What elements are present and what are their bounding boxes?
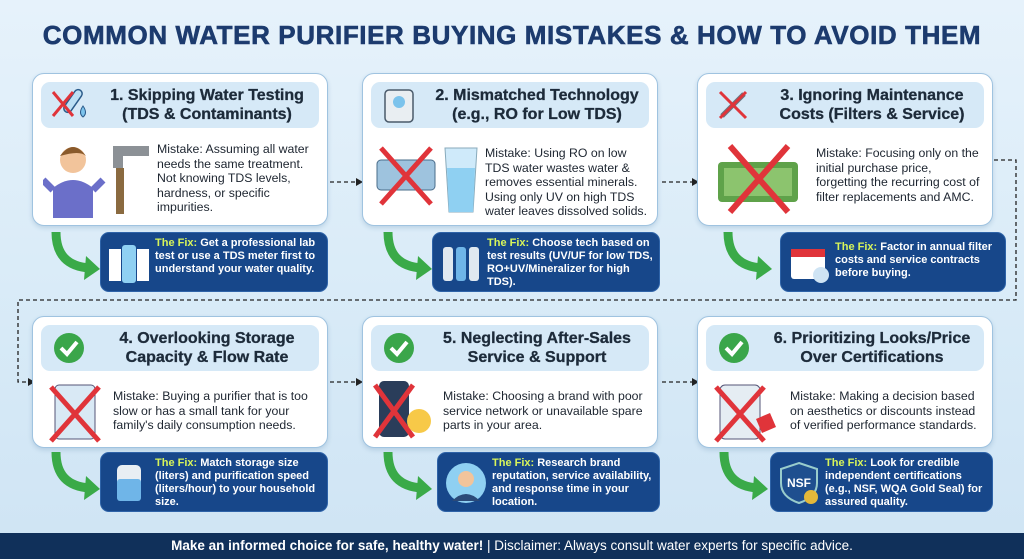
panel: 3 ignoring maintenance costs <box>697 73 993 226</box>
fix box 5 <box>437 452 660 512</box>
fix box 6: The Fix: Look for credible independent certifications (e.g., NSF, WQA Gold Seal) for assured quality. <box>825 457 982 508</box>
green arrow 2 <box>384 232 432 280</box>
heading 4 <box>41 325 319 371</box>
panel: 6 looks/price over certifications <box>697 316 993 448</box>
heading 2 <box>371 82 649 128</box>
fix box 3: The Fix: Factor in annual filter costs and service contracts before buying. <box>835 241 992 279</box>
fix box 1: The Fix: Get a professional lab test or use a TDS meter first to understand your water quality. <box>155 237 315 275</box>
fix box 6: NSF <box>787 476 811 490</box>
title: COMMON WATER PURIFIER BUYING MISTAKES & HOW TO AVOID THEM <box>43 20 981 50</box>
heading 4: Capacity & Flow Rate <box>126 349 288 366</box>
panel: 5 after-sales service <box>362 316 658 448</box>
mistake text: Mistake: Using RO on low TDS water wastes water & removes essential minerals. Using only UV on high TDS water leaves dissolved solids. <box>485 146 647 218</box>
green arrow 3 <box>724 232 772 280</box>
fix box 4 <box>100 452 328 512</box>
panel: 2 mismatched technology <box>362 73 658 226</box>
illustration: fancy purifier crossed <box>714 384 776 443</box>
green arrow 4 <box>52 452 100 500</box>
green arrow 1 <box>52 232 100 280</box>
mistake text: Mistake: Buying a purifier that is too slow or has a small tank for your family's daily consumption needs. <box>113 389 308 432</box>
illustration: broken phone and sad face <box>373 381 431 438</box>
illustration: water tank crossed <box>49 384 101 443</box>
fix box 5: The Fix: Research brand reputation, service availability, and response time in your location. <box>492 457 651 508</box>
heading 5 <box>371 325 649 371</box>
heading 1 <box>41 82 319 128</box>
footer: Make an informed choice for safe, healthy water! | Disclaimer: Always consult water experts for specific advice. <box>171 538 853 553</box>
fix box 3 <box>780 232 1006 292</box>
heading 5: Service & Support <box>468 349 606 366</box>
illustration: money crossed <box>718 144 798 214</box>
mistake text: Mistake: Choosing a brand with poor service network or unavailable spare parts in your area. <box>443 389 643 432</box>
panel: 1 skipping water testing <box>32 73 328 226</box>
illustration: RO membrane and glass <box>376 146 478 212</box>
green arrow 5 <box>384 452 432 500</box>
fix box 4: The Fix: Match storage size (liters) and purification speed (liters/hour) to your household size. <box>155 457 315 508</box>
heading 5: 5. Neglecting After-Sales <box>443 330 631 347</box>
fix box 1 <box>100 232 328 292</box>
heading 3 <box>706 82 984 128</box>
fix box 2: The Fix: Choose tech based on test results (UV/UF for low TDS, RO+UV/Mineralizer for high TDS). <box>487 237 653 288</box>
heading 2: (e.g., RO for Low TDS) <box>452 106 622 123</box>
heading 3: 3. Ignoring Maintenance <box>780 87 964 104</box>
heading 6 <box>706 325 984 371</box>
heading 6: Over Certifications <box>800 349 944 366</box>
fix box 6 <box>770 452 993 512</box>
panel: 4 storage capacity <box>32 316 328 448</box>
heading 3: Costs (Filters & Service) <box>780 106 964 123</box>
mistake text: Mistake: Assuming all water needs the same treatment. Not knowing TDS levels, hardness, or specific impurities. <box>157 142 309 214</box>
heading 6: 6. Prioritizing Looks/Price <box>774 330 970 347</box>
heading 4: 4. Overlooking Storage <box>119 330 295 347</box>
heading 1: 1. Skipping Water Testing <box>110 87 304 104</box>
footer <box>0 533 1024 559</box>
illustration: person and tap <box>43 146 149 218</box>
green arrow 6 <box>720 452 768 500</box>
mistake text: Mistake: Making a decision based on aesthetics or discounts instead of verified performance standards. <box>790 389 977 432</box>
heading 2: 2. Mismatched Technology <box>435 87 639 104</box>
fix box 2 <box>432 232 660 292</box>
mistake text: Mistake: Focusing only on the initial purchase price, forgetting the recurring cost of filter replacements and AMC. <box>816 146 979 204</box>
heading 1: (TDS & Contaminants) <box>122 106 292 123</box>
